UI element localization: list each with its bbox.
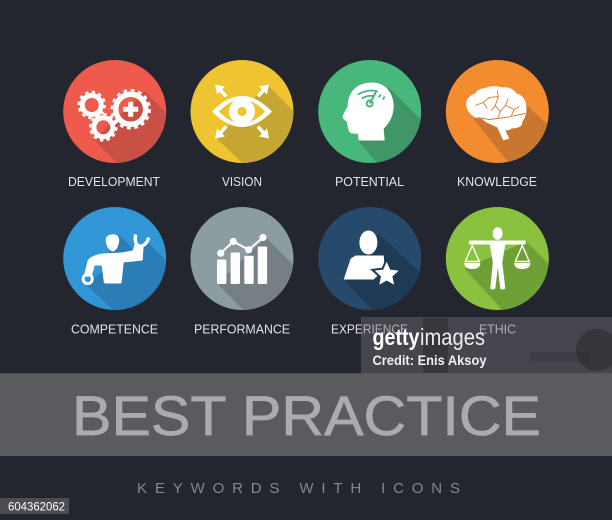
label: experience: EXPERIENCE [331, 322, 408, 336]
panel: performance [190, 207, 294, 334]
panel: ethic [446, 207, 549, 334]
watermark brand: images [420, 324, 485, 350]
panel: experience [318, 207, 422, 334]
watermark brand [372, 324, 485, 350]
title banner [0, 373, 612, 456]
icon: eye with arrows [190, 60, 294, 163]
panel: vision [190, 60, 294, 186]
watermark [361, 317, 612, 374]
panel: competence [63, 207, 166, 334]
label: vision: VISION [222, 175, 262, 189]
label: development: DEVELOPMENT [68, 175, 160, 189]
icon: human balance scales [446, 207, 549, 310]
title: BEST PRACTICE [72, 384, 541, 447]
icon: worker with wrench [63, 207, 166, 310]
icon: head with gauge [318, 60, 422, 163]
watermark credit: Credit: Enis Aksoy [372, 353, 487, 368]
icon: brain [446, 60, 549, 163]
icon: person with star [318, 207, 422, 310]
subtitle: KEYWORDS WITH ICONS [137, 480, 460, 497]
label: competence: COMPETENCE [71, 322, 158, 336]
image id badge: 604362062 [8, 500, 65, 514]
icon: development gears [63, 60, 166, 163]
panel: knowledge [446, 60, 549, 186]
icon: bar chart with trend line [190, 207, 294, 310]
label: potential: POTENTIAL [335, 175, 404, 189]
panel: development [63, 60, 166, 186]
label: performance: PERFORMANCE [194, 322, 290, 336]
label: knowledge: KNOWLEDGE [457, 175, 537, 189]
label: ethic: ETHIC [479, 322, 516, 336]
watermark brand: getty [372, 324, 420, 350]
panel: potential [318, 60, 422, 186]
